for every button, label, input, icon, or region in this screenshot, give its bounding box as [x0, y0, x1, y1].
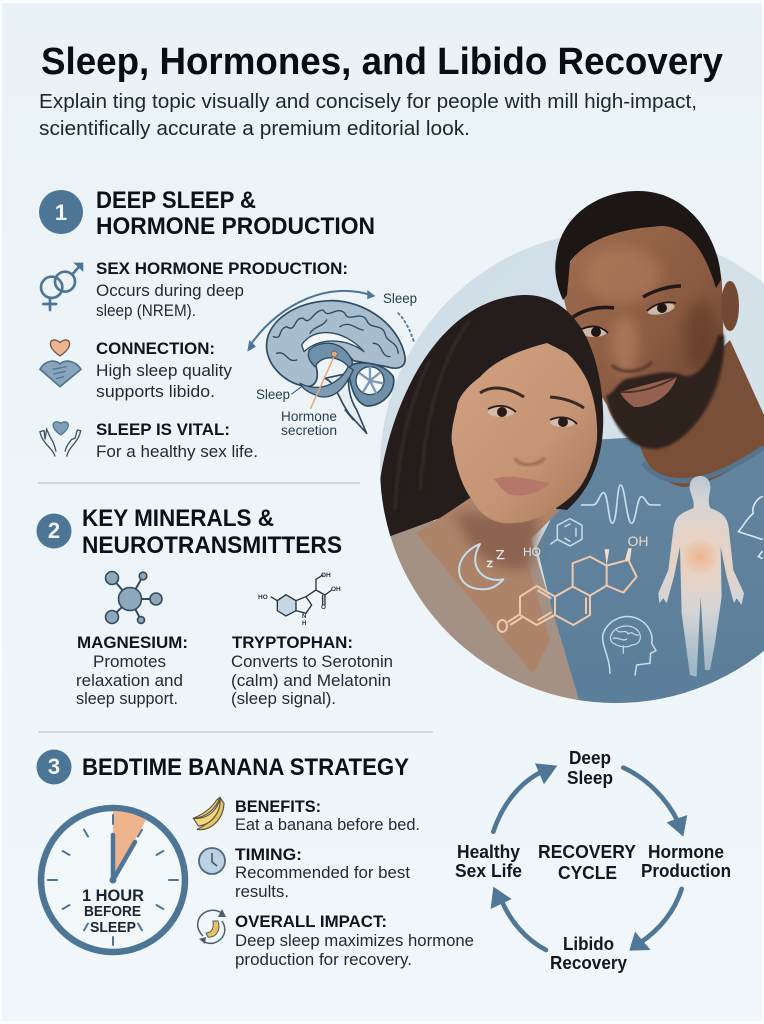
intro text [39, 91, 697, 140]
icon: overall impact [198, 909, 226, 944]
icon: small clock [199, 848, 225, 874]
cycle centre label [538, 842, 636, 883]
cycle arrows [491, 763, 687, 951]
diagram: brain: secretion [281, 423, 337, 438]
text: tryptophan: (calm) and Melatonin [231, 671, 391, 690]
text: benefits: BENEFITS: [235, 797, 321, 816]
text: sex hormone production: Occurs during deep [96, 281, 244, 300]
text: magnesium [76, 633, 188, 708]
heading 2: NEUROTRANSMITTERS [82, 532, 342, 559]
diagram: brain: Sleep [256, 387, 290, 402]
cycle node: libido recovery: Recovery [550, 953, 627, 973]
photo: couple with science overlays: HO [523, 545, 541, 559]
text: sleep is vital: For a healthy sex life. [96, 442, 258, 461]
partial brain at right edge [738, 497, 762, 558]
clock: 1 hour before sleep: BEFORE [84, 904, 141, 920]
heading 2 [82, 505, 342, 559]
cycle node: libido recovery: Libido [563, 934, 614, 954]
badge 2: 2 [48, 518, 60, 543]
cycle node: hormone production: Hormone [648, 842, 724, 862]
text: sex hormone production: SEX HORMONE PRODUCTION: [96, 259, 348, 278]
text: magnesium: relaxation and [76, 671, 183, 690]
badge 2 [36, 514, 72, 548]
diagram: brain [247, 290, 417, 438]
text: sex hormone production [96, 259, 348, 320]
text: timing: results. [235, 882, 289, 901]
text: tryptophan: TRYPTOPHAN: [232, 633, 353, 652]
body silhouette [658, 476, 744, 677]
icon: banana [193, 797, 224, 830]
text: overall impact: production for recovery. [235, 950, 412, 969]
benzene [551, 519, 582, 546]
clock: 1 hour before sleep: 1 HOUR [82, 886, 144, 905]
photo: couple with science overlays: OH [628, 533, 648, 549]
photo: couple with science overlays [378, 191, 764, 720]
text: sleep is vital [96, 420, 258, 461]
text: connection: supports libido. [96, 382, 215, 401]
text: sex hormone production: sleep (NREM). [96, 301, 196, 320]
text: sleep is vital: SLEEP IS VITAL: [96, 420, 230, 439]
text: timing [235, 845, 410, 901]
title: Sleep, Hormones, and Libido Recovery [41, 41, 723, 83]
moon [459, 544, 503, 589]
text: connection: CONNECTION: [96, 339, 215, 358]
text: magnesium: MAGNESIUM: [77, 633, 188, 652]
icon: tryptophan molecule: OH [331, 586, 341, 593]
icon: tryptophan molecule: H [302, 621, 306, 627]
cycle node: healthy sex life: Sex Life [455, 861, 522, 881]
clock: 1 hour before sleep [41, 808, 185, 952]
icon: connection hearts [40, 340, 81, 387]
icon: tryptophan molecule: HO [258, 594, 268, 601]
cycle node: healthy sex life [455, 842, 522, 881]
text: overall impact: OVERALL IMPACT: [235, 912, 387, 931]
badge 1: 1 [55, 200, 67, 225]
text: tryptophan: (sleep signal). [231, 689, 336, 708]
icon: tryptophan molecule: O [321, 604, 326, 611]
text: benefits [235, 797, 420, 834]
cycle node: deep sleep: Deep [569, 748, 611, 768]
section 3: bedtime banana strategy [36, 750, 474, 969]
cycle node: libido recovery [550, 934, 627, 973]
man [563, 226, 724, 447]
wave [582, 485, 660, 523]
heading 2: KEY MINERALS & [82, 505, 274, 532]
text: timing: Recommended for best [235, 863, 410, 882]
section 2: key minerals and neurotransmitters [36, 505, 393, 708]
text: overall impact [235, 912, 474, 969]
icon: tryptophan molecule: N [302, 614, 306, 620]
heading 1 [96, 187, 375, 240]
intro text: Explain ting topic visually and concisely for people with mill high-impact, [39, 91, 697, 113]
diagram: brain: Hormone [281, 409, 337, 424]
text: magnesium: Promotes [93, 652, 166, 671]
icon: gender symbols [41, 263, 83, 310]
text: overall impact: Deep sleep maximizes hormone [235, 931, 474, 950]
diagram: brain: Sleep [383, 291, 417, 306]
woman [378, 295, 603, 537]
icon: tryptophan molecule: OH [321, 572, 331, 579]
text: connection [96, 339, 232, 401]
text: benefits: Eat a banana before bed. [235, 815, 420, 834]
diagram: recovery cycle [455, 748, 731, 973]
text: timing: TIMING: [235, 845, 302, 864]
icon: hands with heart [40, 422, 81, 457]
heading 3: BEDTIME BANANA STRATEGY [82, 754, 409, 781]
section 1: deep sleep and hormone production [39, 187, 417, 461]
intro text: scientifically accurate a premium editorial look. [39, 118, 470, 140]
text: magnesium: sleep support. [76, 689, 178, 708]
cycle centre label: CYCLE [558, 863, 617, 883]
cycle node: hormone production [641, 842, 731, 881]
badge 3: 3 [48, 754, 60, 779]
cycle node: deep sleep [567, 748, 613, 788]
cycle node: healthy sex life: Healthy [457, 842, 520, 862]
icon: magnesium molecule [106, 572, 162, 624]
cycle centre label: RECOVERY [538, 842, 636, 862]
heading 1: HORMONE PRODUCTION [96, 213, 375, 240]
science overlays [459, 476, 762, 677]
badge 3 [36, 750, 72, 784]
heading 1: DEEP SLEEP & [96, 187, 256, 214]
icon: tryptophan molecule [258, 572, 341, 627]
steroid [508, 557, 637, 625]
text: connection: High sleep quality [96, 361, 232, 380]
brain head [603, 617, 656, 675]
cycle node: deep sleep: Sleep [567, 768, 613, 788]
clock: 1 hour before sleep: SLEEP [90, 920, 136, 936]
text: tryptophan: Converts to Serotonin [231, 652, 393, 671]
cycle node: hormone production: Production [641, 861, 731, 881]
badge 1 [39, 190, 83, 234]
text: tryptophan [231, 633, 393, 708]
